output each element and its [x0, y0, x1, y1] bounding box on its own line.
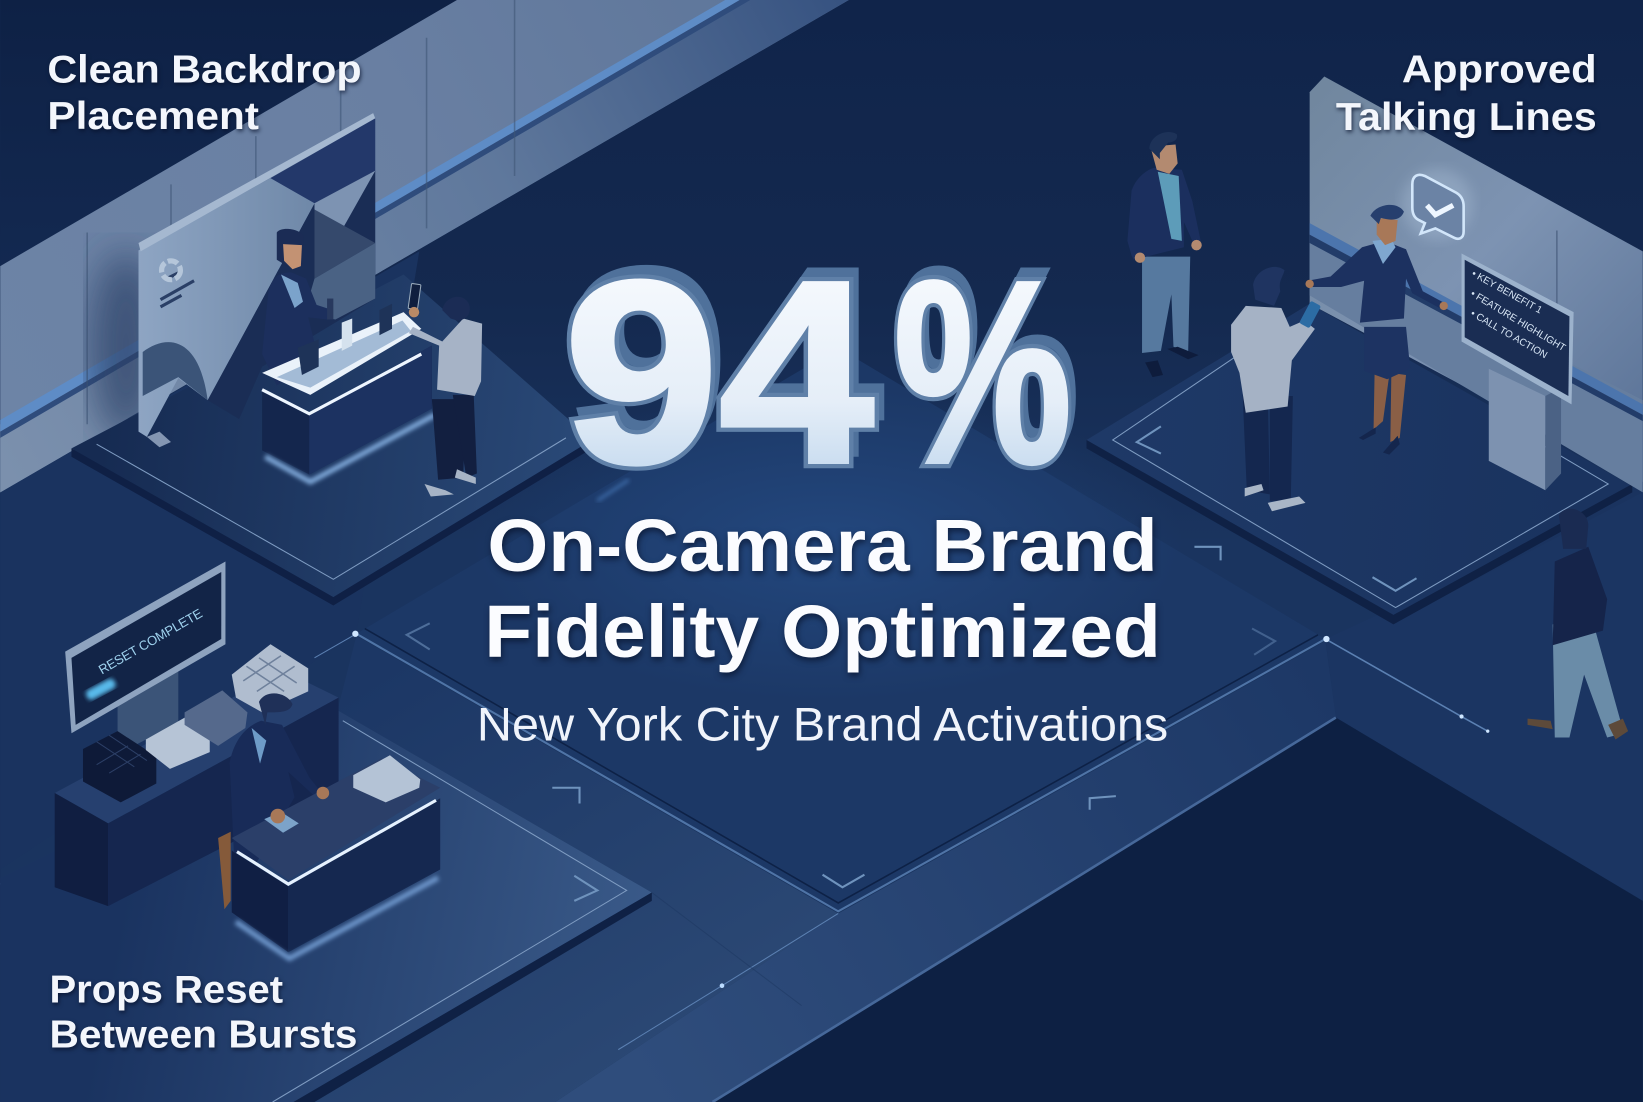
- center corner marks: [407, 547, 1275, 887]
- icon: speech bubble check: [1402, 169, 1473, 240]
- approved lines screen: • FEATURE HIGHLIGHT: [1468, 289, 1567, 354]
- stat: 94%: 4: [719, 228, 876, 518]
- lower band: [555, 641, 1336, 1102]
- approved lines screen: • KEY BENEFIT 1: [1470, 269, 1544, 317]
- backdrop: [139, 113, 375, 447]
- panel: props reset platform: [0, 561, 652, 1102]
- stat: 94%: 4: [725, 217, 882, 507]
- approved lines screen: [1462, 254, 1574, 404]
- lower left floor: [304, 636, 838, 1102]
- label: props reset between bursts: Props Reset: [49, 967, 283, 1011]
- label: props reset between bursts: [49, 967, 357, 1057]
- panel: approved talking lines platform: [1087, 76, 1643, 624]
- kiosk stand: [1489, 369, 1561, 490]
- label: approved talking lines: Talking Lines: [1336, 95, 1597, 139]
- floor: lower right lane: [1325, 492, 1643, 901]
- label: clean backdrop placement: [47, 48, 362, 138]
- panel: clean backdrop placement platform: [71, 113, 592, 605]
- floor: lower left base: [0, 251, 419, 869]
- figure: staff woman wiping counter: [218, 693, 322, 909]
- edge highlight of dark floor: [713, 718, 1336, 1102]
- stat: 94%: 9: [564, 228, 719, 518]
- label: clean backdrop placement: Placement: [47, 94, 259, 138]
- light path lines: [0, 631, 1489, 1050]
- lower right dark floor: [713, 718, 1643, 1102]
- figure: staff woman at counter: [262, 229, 333, 385]
- back cabinet: [55, 561, 339, 906]
- stat: 94%: %: [899, 217, 1077, 507]
- heading: [484, 504, 1161, 673]
- stat: 94%: 4: [719, 228, 876, 518]
- figure: guest photographing: [408, 283, 482, 497]
- approved lines screen: • CALL TO ACTION: [1468, 308, 1549, 361]
- heading: Fidelity Optimized: [484, 590, 1161, 673]
- figure: walking person: [1528, 509, 1628, 740]
- label: props reset between bursts: Between Bursts: [49, 1013, 357, 1057]
- display counter: [262, 304, 435, 482]
- figure: standing man: [1127, 132, 1202, 377]
- stat: 94%: 9: [570, 217, 725, 507]
- figure: guest with phone: [1231, 267, 1321, 511]
- panel: top-left wall: [0, 0, 849, 492]
- stat: 94%: [564, 217, 1077, 518]
- subheading: New York City Brand Activations: [477, 698, 1168, 751]
- label: approved talking lines: [1336, 48, 1597, 139]
- figure: presenter: [1305, 205, 1448, 455]
- stat: 94%: %: [894, 228, 1072, 518]
- back cabinet: RESET COMPLETE: [96, 605, 205, 677]
- center diamond floor: [356, 348, 1325, 911]
- wall stripe: [0, 0, 740, 432]
- label: clean backdrop placement: Clean Backdrop: [47, 48, 362, 92]
- label: approved talking lines: Approved: [1402, 48, 1597, 92]
- stat: 94%: %: [894, 228, 1072, 518]
- right wall: [1310, 76, 1643, 492]
- heading: On-Camera Brand: [487, 504, 1158, 587]
- stat: 94%: 9: [564, 228, 719, 518]
- front counter: [232, 755, 440, 958]
